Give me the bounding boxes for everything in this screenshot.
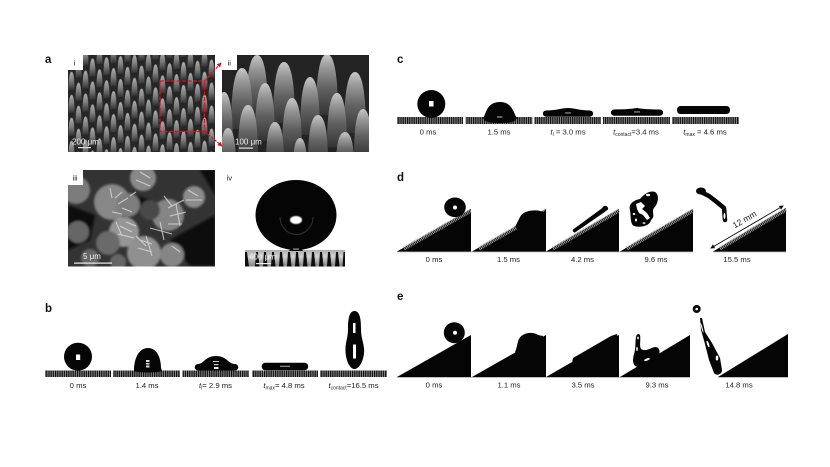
SEM image i [68, 55, 215, 152]
panel d [397, 172, 786, 264]
frame tmax 4.6 ms: = 4.6 ms [695, 128, 727, 136]
frame tmax 4.8 ms [262, 363, 308, 392]
frame 0 ms: 0 ms [426, 255, 442, 264]
SEM image ii: 100 μm [235, 138, 262, 146]
SEM image i: 200 μm [72, 138, 99, 146]
frame tcontact 3.4 ms: t [613, 128, 616, 136]
slopes [397, 334, 788, 377]
frame 1.5 ms: 1.5 ms [487, 128, 511, 136]
SEM image ii [222, 55, 369, 152]
frame tmax 4.8 ms: t [263, 381, 266, 390]
frame 1.1 ms: 1.1 ms [497, 380, 521, 390]
frame 14.8 ms [693, 305, 753, 390]
frame 1.4 ms [134, 348, 162, 390]
frame 0 ms: 0 ms [426, 380, 442, 390]
frame 9.3 ms: 9.3 ms [645, 380, 669, 390]
red zoom box with arrows [160, 63, 222, 146]
label d: d [397, 172, 404, 184]
frame 9.6 ms [630, 191, 668, 264]
label c: c [397, 54, 404, 66]
frame tcontact 16.5 ms [328, 311, 379, 392]
arrow 12 mm [711, 206, 783, 248]
panel b [45, 303, 387, 392]
SEM image iii: 5 μm [83, 252, 101, 261]
frame tmax 4.6 ms [677, 106, 730, 138]
frame 1.5 ms: 1.5 ms [497, 255, 520, 264]
frame tmax 4.8 ms: max [265, 386, 275, 392]
frame tmax 4.6 ms: max [685, 132, 695, 138]
frame t1 3.0 ms: l [553, 132, 554, 138]
frame tcontact 3.4 ms: =3.4 ms [631, 128, 659, 136]
frame 0 ms [426, 198, 466, 264]
frame t1 2.9 ms: = 2.9 ms [202, 381, 232, 390]
frame tcontact 3.4 ms: contact [615, 132, 632, 138]
frame tcontact 16.5 ms: =16.5 ms [347, 381, 379, 390]
frame 9.3 ms [633, 334, 669, 390]
frame t1 3.0 ms: t [550, 128, 553, 136]
contact angle image iv [226, 174, 345, 266]
frame 3.5 ms [571, 334, 618, 390]
frame t1 3.0 ms: = 3.0 ms [554, 128, 586, 136]
frame 1.4 ms: 1.4 ms [135, 381, 159, 390]
frame 0 ms [426, 322, 465, 390]
strips [397, 117, 739, 124]
contact angle image iv: iv [226, 174, 232, 182]
arrow 12 mm: 12 mm [731, 209, 758, 230]
strips [45, 370, 387, 377]
SEM image iii [68, 170, 215, 266]
frame 0 ms: 0 ms [70, 381, 86, 390]
SEM image ii: ii [228, 58, 231, 68]
pillars [245, 250, 345, 266]
frame 15.5 ms: 15.5 ms [723, 255, 751, 264]
panel c [397, 54, 739, 138]
contact angle image iv: 400 μm [249, 252, 276, 262]
SEM image iii: iii [72, 174, 78, 182]
frame 4.2 ms [571, 206, 608, 264]
label b: b [45, 303, 52, 315]
frame 1.5 ms [497, 210, 546, 264]
frame tmax 4.8 ms: = 4.8 ms [275, 381, 305, 390]
label e: e [397, 291, 403, 303]
frame tmax 4.6 ms: t [683, 128, 686, 136]
frame 9.6 ms: 9.6 ms [644, 255, 668, 264]
frame t1 2.9 ms: l [201, 386, 202, 392]
frame 3.5 ms: 3.5 ms [571, 380, 595, 390]
frame t1 2.9 ms [195, 356, 238, 392]
frame 4.2 ms: 4.2 ms [571, 255, 594, 264]
frame 0 ms [417, 90, 445, 136]
frame t1 3.0 ms [543, 108, 593, 138]
panel e [397, 291, 788, 390]
panel a [45, 54, 372, 270]
frame 0 ms: 0 ms [420, 128, 436, 136]
frame t1 2.9 ms: t [199, 381, 202, 390]
frame 0 ms [64, 343, 92, 390]
slopes [397, 208, 786, 252]
label a: a [45, 54, 52, 66]
frame 1.1 ms [497, 333, 544, 390]
frame 1.5 ms [483, 102, 517, 136]
frame tcontact 16.5 ms: t [328, 381, 331, 390]
frame 14.8 ms: 14.8 ms [725, 380, 753, 390]
frame tcontact 3.4 ms [611, 108, 663, 138]
frame 15.5 ms [696, 188, 751, 264]
SEM image i: i [74, 58, 76, 68]
water drop [256, 180, 336, 251]
frame tcontact 16.5 ms: contact [331, 386, 347, 392]
